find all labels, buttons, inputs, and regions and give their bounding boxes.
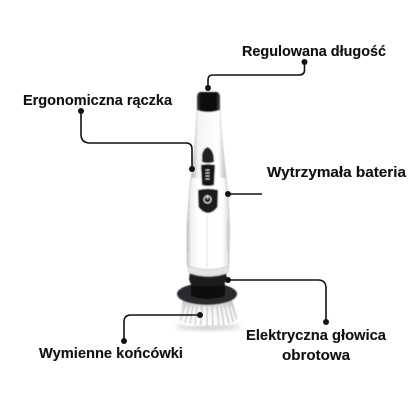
upper button [202,147,214,163]
callout: Wytrzymała bateria [225,164,407,197]
handle body [187,109,230,272]
battery indicator panel [201,164,215,186]
brush shadow [176,324,240,330]
callout: Elektryczna głowica obrotowa: Elektryczna głowica [246,327,387,344]
upper handle shading [192,110,226,178]
lower neck [191,284,225,299]
callout: Regulowana długość [205,43,386,91]
callout: Wytrzymała bateria: Wytrzymała bateria [267,164,407,181]
callout: Wymienne końcówki: Wymienne końcówki [39,345,183,362]
callout: Ergonomiczna rączka [23,92,195,172]
collar [188,266,229,276]
side grip [188,220,228,252]
callout: Regulowana długość: Regulowana długość [242,43,386,60]
body seam [206,215,208,268]
brush disc [177,283,237,305]
upper neck [189,272,227,286]
power button [198,189,218,213]
callout: Elektryczna głowica obrotowa: obrotowa [282,347,351,364]
bristles [178,300,238,326]
black cap [197,92,220,112]
callout: Elektryczna głowica obrotowa [225,277,387,364]
callout: Wymienne końcówki [39,312,203,362]
product: electric brush [176,92,240,330]
callout: Ergonomiczna rączka: Ergonomiczna rączka [23,92,173,109]
